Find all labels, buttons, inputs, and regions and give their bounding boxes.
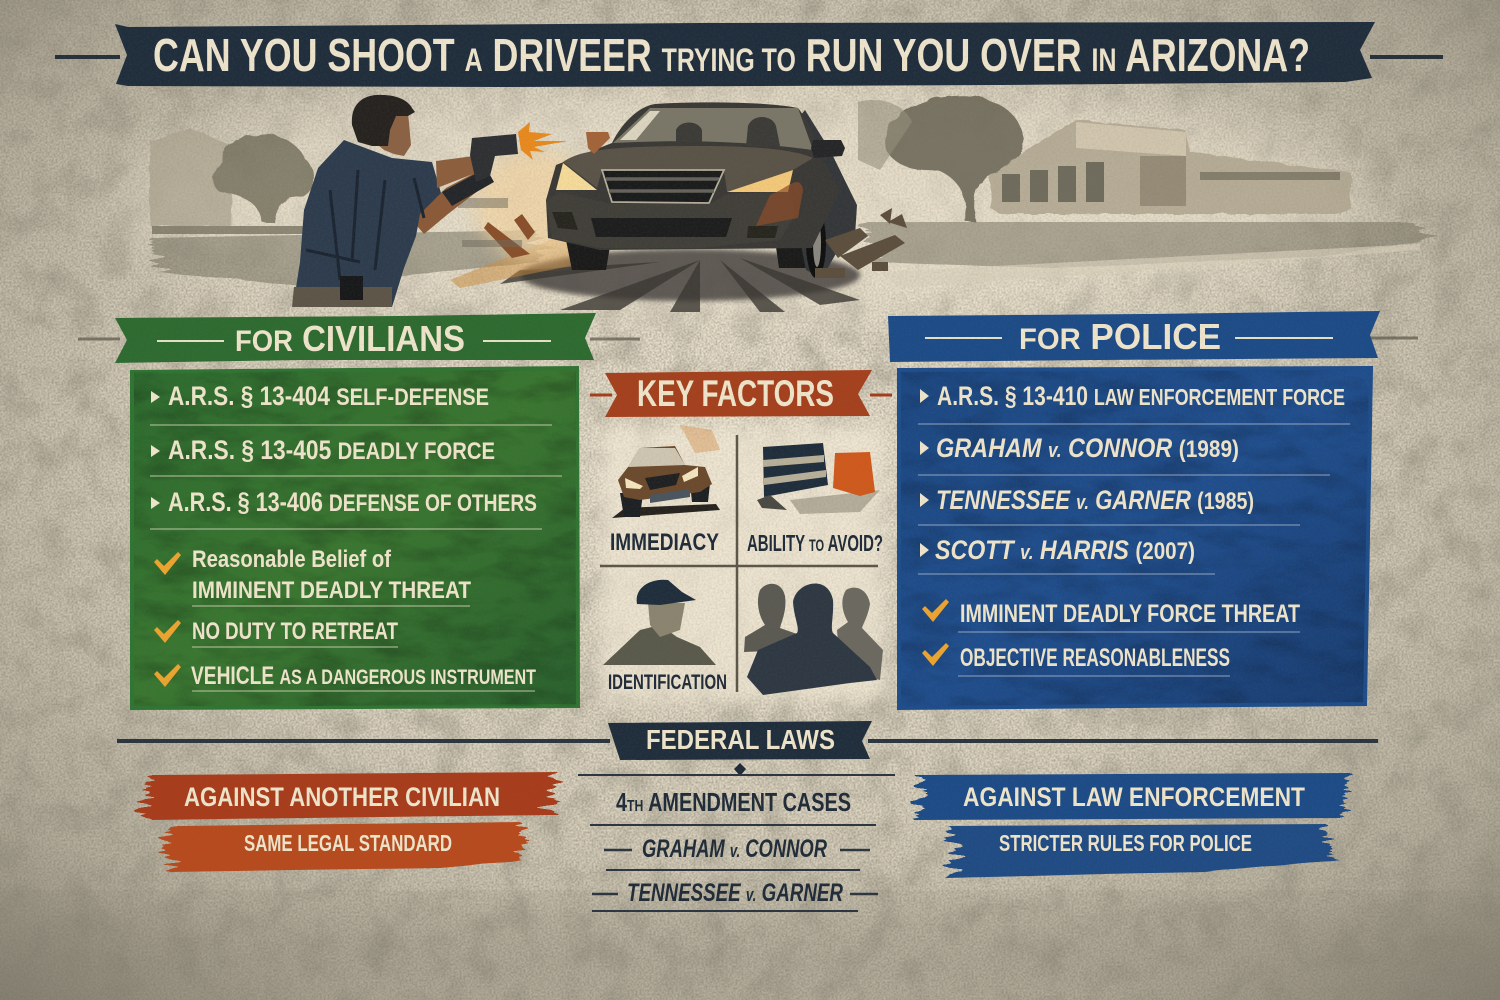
left column: civilian xyxy=(140,772,554,872)
belt and holster xyxy=(292,287,392,307)
explosion rays under car xyxy=(450,150,860,312)
gun and hand xyxy=(470,134,518,182)
center column: 4th amendment cases: TENNESSEE v. GARNER xyxy=(627,879,843,907)
far forearm and hand xyxy=(412,168,492,234)
police checklist: OBJECTIVE REASONABLENESS xyxy=(960,644,1230,672)
icon: car immediacy xyxy=(612,425,720,518)
police checklist: IMMINENT DEADLY FORCE THREAT xyxy=(960,600,1300,628)
police checklist xyxy=(922,599,1300,672)
civilian checklist: VEHICLE AS A DANGEROUS INSTRUMENT xyxy=(191,662,536,690)
right column: law enforcement: AGAINST LAW ENFORCEMENT xyxy=(963,782,1305,812)
panel: civilians xyxy=(78,313,640,710)
shirt xyxy=(293,140,441,307)
police statute and case rows xyxy=(920,381,1345,565)
statute rows: A.R.S. § 13-405 DEADLY FORCE xyxy=(168,435,495,465)
statute rows xyxy=(151,381,537,517)
police header xyxy=(888,311,1418,362)
police statute and case rows: A.R.S. § 13-410 LAW ENFORCEMENT FORCE xyxy=(937,381,1345,411)
center column: 4th amendment cases: GRAHAM v. CONNOR xyxy=(642,835,827,863)
man xyxy=(292,95,518,307)
left column: civilian: SAME LEGAL STANDARD xyxy=(244,830,452,856)
right column: law enforcement: STRICTER RULES FOR POLICE xyxy=(999,830,1252,856)
hero illustration xyxy=(150,95,1440,312)
left column: civilian: AGAINST ANOTHER CIVILIAN xyxy=(184,782,500,812)
title banner: CAN YOU SHOOT A DRIVEER TRYING TO RUN YOU OVER IN ARIZONA? xyxy=(153,29,1310,81)
civilians header xyxy=(78,313,640,363)
label: ability to avoid: ABILITY TO AVOID? xyxy=(747,530,883,556)
icon: barrier and cone xyxy=(757,443,880,514)
near arm xyxy=(436,156,478,188)
panel: police xyxy=(888,311,1418,710)
title banner xyxy=(55,22,1443,87)
police statute and case rows: TENNESSEE v. GARNER (1985) xyxy=(936,485,1254,515)
debris xyxy=(815,208,907,278)
background trees and house xyxy=(150,128,540,286)
background building and tree xyxy=(858,95,1440,288)
statute rows: A.R.S. § 13-404 SELF-DEFENSE xyxy=(168,381,489,411)
federal laws section xyxy=(117,721,1378,911)
civilian checklist: NO DUTY TO RETREAT xyxy=(192,618,398,645)
muzzle flash xyxy=(518,122,568,160)
police body xyxy=(897,366,1373,710)
police statute and case rows: GRAHAM v. CONNOR (1989) xyxy=(936,433,1239,463)
police header: FOR POLICE xyxy=(1019,316,1221,357)
icon: witnesses xyxy=(744,584,883,695)
civilians header: FOR CIVILIANS xyxy=(235,318,465,359)
right column: law enforcement xyxy=(916,773,1350,878)
civilian checklist xyxy=(154,546,536,690)
civilians body xyxy=(130,366,580,710)
statute rows: A.R.S. § 13-406 DEFENSE OF OTHERS xyxy=(168,487,537,517)
center column: 4th amendment cases: 4TH AMENDMENT CASES xyxy=(616,787,851,817)
civilian checklist: Reasonable Belief of xyxy=(192,546,392,573)
federal laws banner: FEDERAL LAWS xyxy=(646,724,835,755)
label: immediacy: IMMEDIACY xyxy=(610,529,719,556)
center column: 4th amendment cases xyxy=(578,763,895,911)
label: identification: IDENTIFICATION xyxy=(608,671,727,694)
panel: key factors xyxy=(590,370,892,695)
car xyxy=(546,102,857,278)
federal laws banner xyxy=(608,721,872,760)
key factors header: KEY FACTORS xyxy=(637,373,834,414)
civilian checklist: IMMINENT DEADLY THREAT xyxy=(192,577,471,604)
icon: officer xyxy=(603,580,716,665)
head xyxy=(372,108,411,156)
police statute and case rows: SCOTT v. HARRIS (2007) xyxy=(935,535,1195,565)
